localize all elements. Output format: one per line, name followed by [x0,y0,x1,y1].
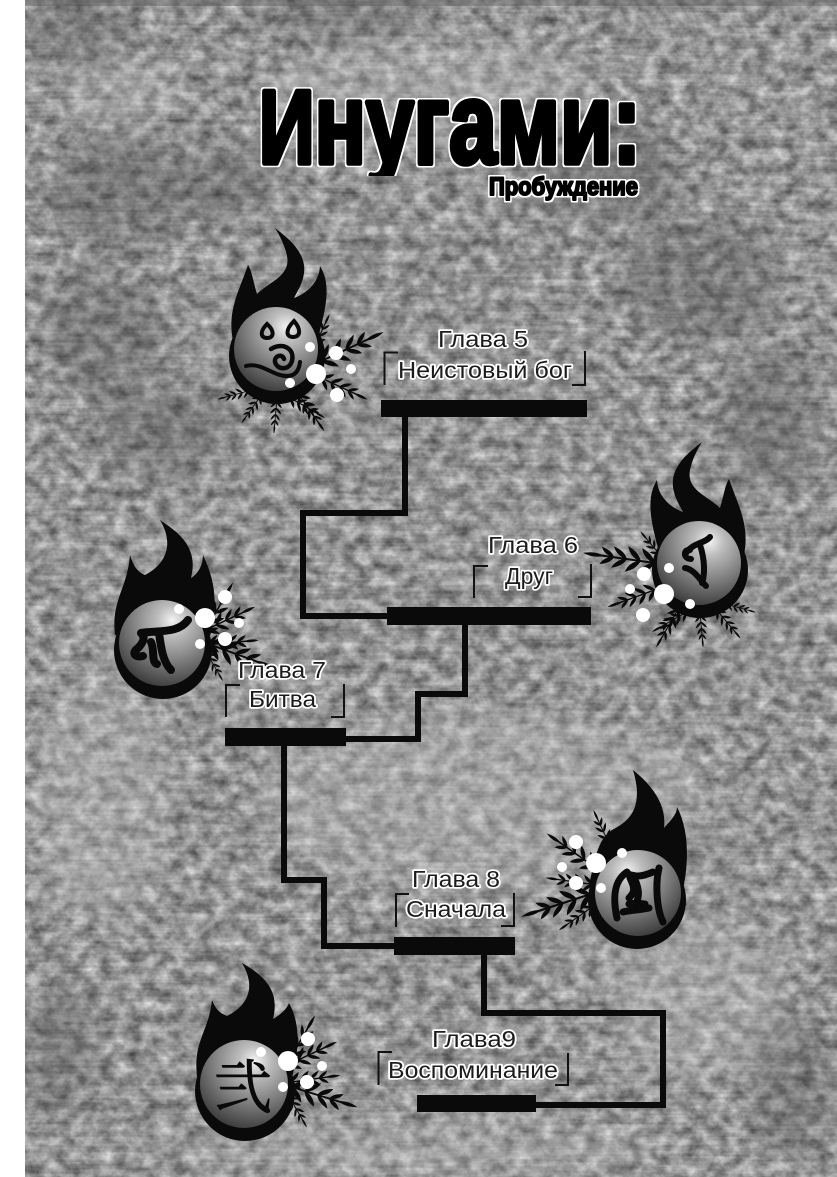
connector: chapter 8 to chapter 9 [484,953,663,1105]
chapter 7 brackets [226,684,344,717]
flame [589,770,687,890]
chapter 8 title: Сначала [406,896,506,922]
sigil [685,537,710,586]
chapter 5 title: Неистовый бог [398,357,572,383]
chapter 7 number: Глава 7 [238,657,326,683]
title: Инугами:: Инугами: [259,60,641,188]
chapter 7 title: Битва [249,686,316,712]
chapter 7 bar [225,728,346,746]
chapter 5 brackets [384,351,585,385]
sigil [246,321,300,376]
emblem: chapter 9 flame sphere [195,963,359,1141]
chapter 6 title: Друг [505,563,553,589]
glowing orbs [557,835,627,893]
sigil: 弐: 弐 [214,1041,272,1125]
chapter 8 number: Глава 8 [412,866,500,892]
sphere [588,851,686,949]
chapter 6 brackets [474,564,591,598]
chapter 7 block [225,657,346,746]
connector: chapter 5 to chapter 6 [303,414,405,616]
glowing orbs [625,563,695,622]
flame [114,520,215,640]
chapter 5 block [381,326,587,417]
sphere [195,1041,295,1141]
chapter 6 bar [387,607,591,625]
glowing orbs [256,1032,327,1092]
glowing orbs [285,342,356,402]
chapter 6 block [387,532,591,625]
leaves [583,528,756,650]
sphere [652,522,748,618]
emblem: chapter 6 flame sphere [583,442,756,650]
flame [196,963,298,1081]
chapter 9 brackets [378,1052,568,1085]
sphere [114,601,212,699]
flame [231,228,327,341]
connector: chapter 6 to chapter 7 [344,622,465,739]
glowing orbs [174,590,244,649]
chapter 9 number: Глава9 [432,1026,516,1052]
leaves [519,808,618,935]
emblem: chapter 8 flame sphere [519,770,687,949]
chapter 8 bar [394,937,515,955]
chapter 8 brackets [396,893,514,927]
chapter 9 bar [417,1095,536,1112]
chapter 8 block [394,866,515,955]
chapter 9 block [378,1026,568,1112]
emblem: chapter 5 flame sphere [217,228,387,434]
subtitle: Пробуждение: Пробуждение [489,173,638,201]
chapter 6 number: Глава 6 [488,532,578,558]
leaves [275,1012,359,1130]
sphere [229,308,325,404]
flame [650,442,746,555]
leaves [193,579,277,683]
sigil [615,868,663,922]
chapter 9 title: Воспоминание [388,1057,558,1083]
chapter 5 bar [381,400,587,417]
leaves [217,312,387,434]
chapter 5 number: Глава 5 [438,326,528,352]
emblem: chapter 7 flame sphere [114,520,277,699]
sigil [134,620,188,670]
connector: chapter 7 to chapter 8 [284,744,398,946]
